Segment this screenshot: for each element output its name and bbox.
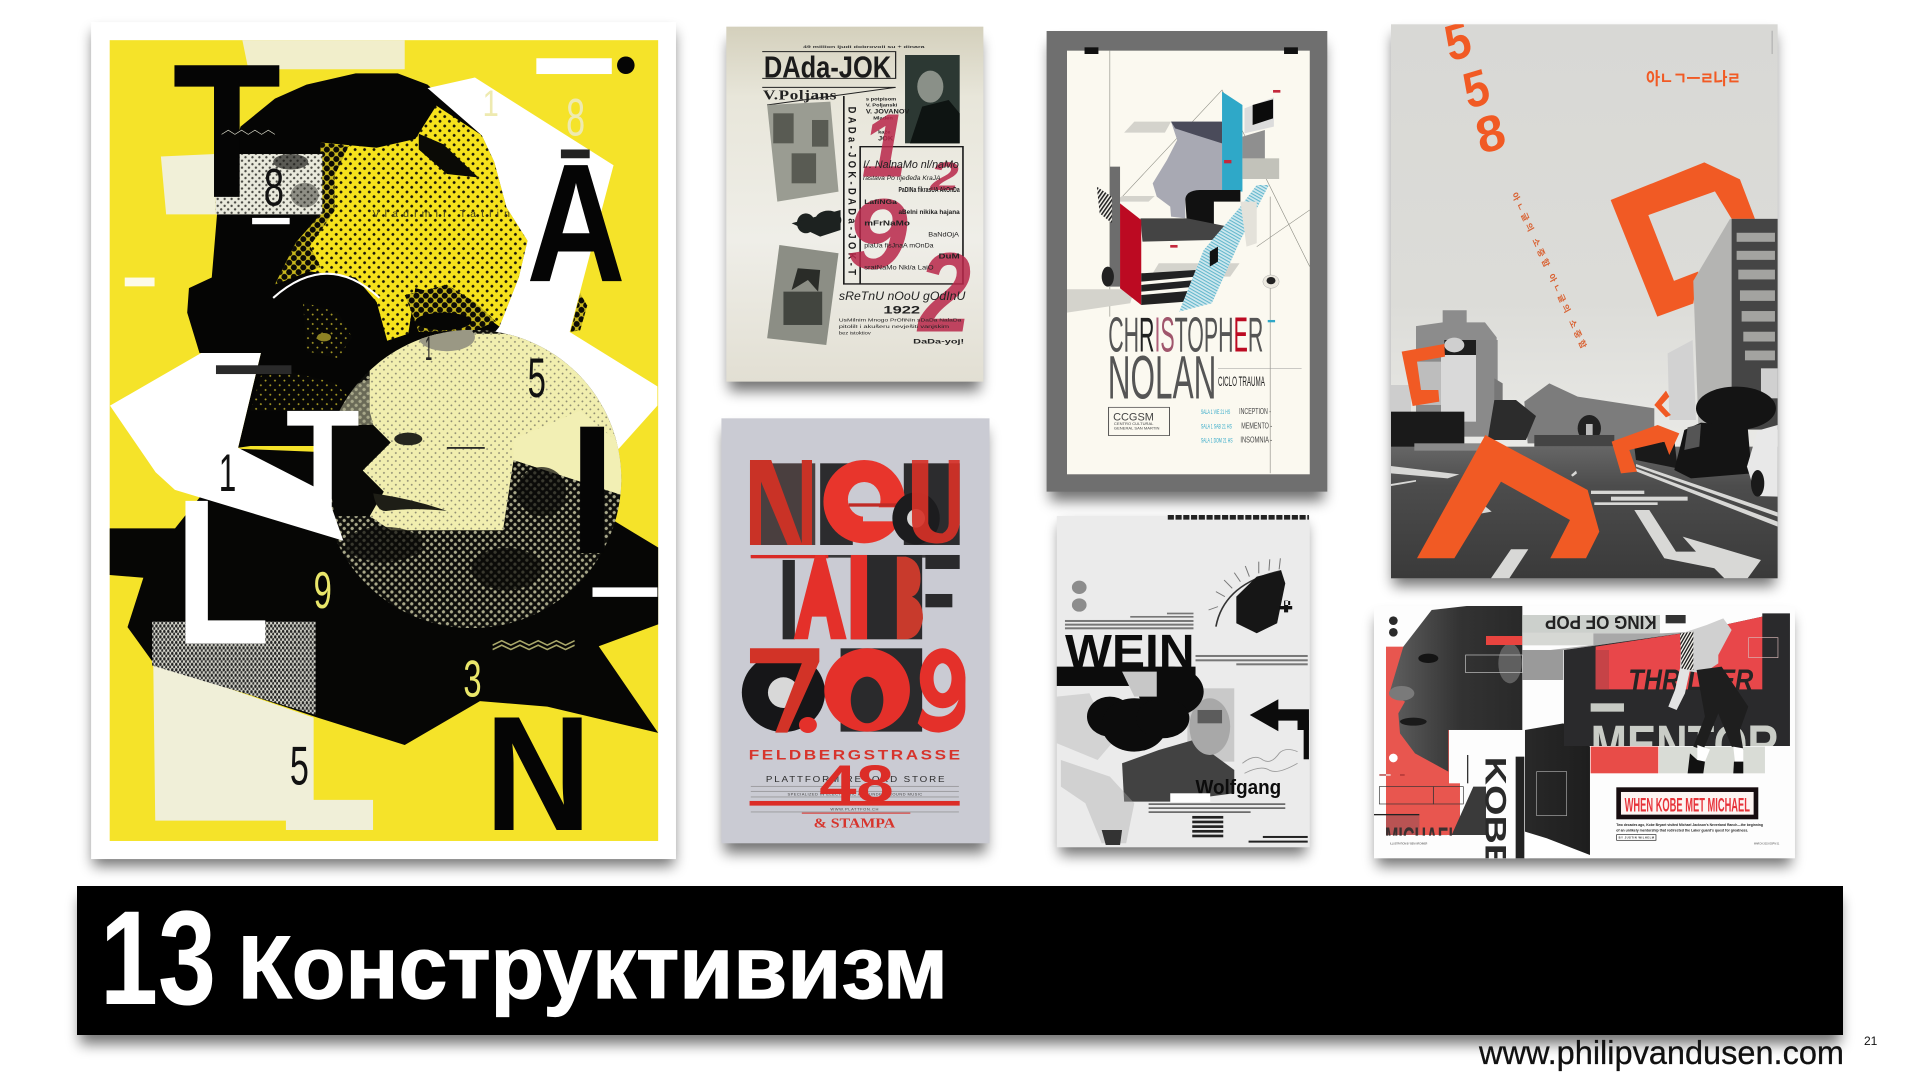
headline DAda-JOK: [762, 50, 896, 84]
title bar: [77, 886, 1843, 1035]
right column text: I/. NalnaMo nl/naMo: [863, 158, 959, 171]
left buildings: [1391, 338, 1536, 448]
Korean heading: 아ㄴㄱㅡㄹ나ㄹ: [1646, 70, 1741, 89]
digits upper: 1: [425, 330, 432, 368]
nose portrait: [1153, 122, 1222, 218]
horizon cars: [1414, 443, 1481, 451]
white dot and dashes: [1379, 754, 1405, 776]
right pale block: [1761, 368, 1778, 398]
black rule: [1374, 814, 1419, 815]
right column text: rastava Po rijeđeđa KraJA: [863, 174, 941, 182]
letter A with macron: A: [527, 129, 625, 317]
letter T white: T: [287, 412, 296, 428]
halftone face: [275, 106, 528, 341]
sky: [1391, 24, 1778, 578]
TAB letters: [751, 555, 923, 639]
digits upper: 1: [219, 444, 236, 503]
bottom text: bez istoktiov: [839, 331, 871, 336]
digits lower: 9: [314, 561, 332, 619]
statue: [783, 268, 822, 325]
numbers 558: 5: [1440, 12, 1477, 73]
collage photo top: [767, 102, 839, 202]
logo box: [1109, 407, 1169, 436]
outline rect ear: [1466, 655, 1522, 673]
head silhouette: [187, 73, 528, 448]
eye shade: [1171, 122, 1222, 143]
side bar: [1304, 720, 1309, 759]
V. Poljanski: V.Poljans: [763, 88, 836, 103]
title text: Конструктивизм: [238, 917, 948, 1017]
small poster text block: s potpisom: [866, 97, 897, 102]
small dark tag: [1666, 615, 1686, 623]
red 1 9 2 2: 9: [847, 178, 908, 290]
poster: Dada-Jok: [726, 27, 983, 382]
title number: 13: [100, 884, 216, 1033]
collage photo statue: [767, 245, 839, 345]
poster paper border: [91, 22, 676, 859]
red 1 9 2 2: 2: [917, 229, 971, 356]
pale skin: [363, 334, 622, 530]
thick rule: [750, 801, 960, 806]
digits upper: [219, 83, 585, 503]
small bars: [125, 56, 657, 597]
nose bridge dark: [415, 313, 471, 330]
torn white: [1525, 832, 1590, 858]
poster lower letters: [152, 457, 592, 866]
grey frame: [1047, 31, 1327, 492]
eye: [303, 302, 352, 358]
number 48: 48: [819, 756, 894, 813]
zigzag: [222, 130, 275, 134]
Wolfgang: Wolfgang: [1196, 775, 1281, 798]
bottom text: [839, 289, 966, 345]
small poster text block: V. Poljanski: [866, 103, 898, 108]
inverted KING OF POP: KING OF POP: [1545, 612, 1657, 633]
small poster text block: Mladen: [873, 116, 893, 121]
grey bands: [1067, 122, 1240, 313]
building photo: [1140, 218, 1236, 242]
store line: PLATTFORM RECORD STORE: [766, 775, 945, 784]
small poster text block: JOK: [878, 136, 893, 142]
right small building: [1668, 340, 1696, 420]
letter L: L: [175, 457, 270, 688]
screening list: SALA 1 SAB 21 HS: [1201, 422, 1232, 430]
shoulder: [1452, 787, 1488, 835]
web address: WWW.PLATTFON.CH: [830, 808, 879, 812]
page number: 21: [1864, 1034, 1878, 1048]
red thin rule: [802, 812, 910, 815]
hair streak: [419, 134, 478, 178]
poster ground: [91, 22, 676, 859]
radial graphic: [1209, 558, 1292, 633]
pale lower left patch: [153, 663, 373, 830]
flat pale plane: [514, 411, 622, 495]
headline DAda-JOK: DAda-JOK: [764, 50, 891, 84]
blue hatch band: [1179, 185, 1269, 312]
letter T: T: [172, 24, 281, 238]
white blocks: [1240, 202, 1257, 247]
nostril: [394, 433, 422, 445]
grey patch on circle left: [340, 380, 373, 425]
byline: BY JUSTIN WILHELM: [1619, 836, 1655, 840]
numbers 558: 5: [1458, 59, 1495, 120]
left tower top: [1416, 310, 1497, 409]
right block: [1242, 97, 1279, 179]
poster: Kobe meets Michael: [1374, 606, 1795, 870]
arrow: [1250, 699, 1309, 731]
bottom text: pitolilI i akušeru nevješiti vanjskim: [839, 324, 949, 330]
right column text: sratNaMo Nkl/a LaiO: [864, 265, 934, 271]
orange mid right form: [1612, 425, 1679, 473]
NEU letters: [750, 460, 960, 545]
white KOBE panel: [1449, 730, 1524, 783]
dark left of face: [332, 424, 391, 516]
small store text: SPECIALIZED IN ELECTRONIC AND UNDERGROUND MUSIC: [788, 793, 923, 796]
name Christopher: CHRISTOPHER: [1108, 307, 1263, 362]
dark red corner: [1386, 814, 1419, 835]
black collar shape: [110, 449, 658, 745]
7.09 figures: [750, 648, 965, 733]
blob: [1087, 667, 1204, 752]
portrait layers: [110, 24, 657, 628]
numbers 558: [1445, 24, 1505, 152]
poster: Tatlin: [91, 22, 676, 866]
Thriller text: THRILLER: [1628, 664, 1753, 697]
screening list: MEMENTO -: [1241, 421, 1272, 431]
pale shape on blob: [1122, 672, 1157, 697]
ciclo trauma: [1218, 368, 1302, 390]
poster: Seoul street: [1391, 12, 1778, 578]
sheet: [1374, 606, 1795, 858]
right column text: LafiNGa: [864, 198, 898, 206]
statue and tree line: [1534, 415, 1614, 447]
top dashes: [1168, 510, 1309, 524]
outline in shoulder: [1537, 772, 1567, 816]
red 1 9 2 2: 1: [862, 96, 907, 196]
orange left form: [1402, 344, 1445, 406]
circle with face: [321, 323, 622, 628]
orange square form: [1611, 162, 1755, 317]
road markings: [1391, 464, 1778, 578]
numbers 558: 8: [1471, 103, 1511, 166]
white shape left: [110, 353, 343, 541]
bottom text: sReTnU nOoU gOdInU: [839, 289, 966, 303]
deck text: Two decades ago, Kobe Bryant visited Michael Jackson's Neverland Ranch—the beginning: [1616, 823, 1763, 827]
small poster text block: V. JOVANOV: [866, 109, 910, 115]
grey collage: [1522, 632, 1693, 680]
letter I: [580, 427, 604, 553]
bottom text block: [1149, 793, 1285, 813]
KOBE white block: [1486, 783, 1515, 858]
stairs: [1141, 270, 1208, 305]
portrait photo: [905, 55, 960, 143]
blue panel: [1222, 92, 1242, 192]
headline box: WHEN KOBE MET MICHAEL: [1625, 795, 1750, 816]
brow shadow: [405, 285, 496, 332]
zigzag lower: [493, 641, 575, 650]
black strip: [1516, 757, 1524, 858]
digits upper: 8: [566, 88, 585, 147]
road: [1391, 447, 1778, 578]
logo box: GENERAL SAN MARTIN: [1114, 427, 1160, 430]
street scene: [1391, 338, 1778, 578]
two dots: [1389, 616, 1398, 637]
illustration credit: ILLUSTRATION BY BEN KIRCHNER: [1390, 843, 1428, 846]
KOBE vertical text: KOBE: [1478, 757, 1511, 870]
outline red panel: [1379, 787, 1463, 804]
logo box: CCGSM: [1113, 411, 1154, 423]
Michael text: MICHAEL: [1385, 822, 1458, 854]
orange bottom form: [1417, 435, 1599, 558]
screening list: [1201, 407, 1272, 445]
darker halftone transition: [275, 142, 349, 285]
text block: [1065, 613, 1308, 665]
black text: [1192, 816, 1308, 843]
red panel: [1120, 203, 1141, 305]
screening list: SALA 1 DOM 21 HS: [1201, 436, 1233, 444]
sky and upper forms: [1391, 12, 1778, 578]
Mentor text: MENTOR: [1591, 713, 1779, 775]
grey top: [419, 330, 475, 352]
pale top patch: [242, 40, 405, 69]
WEIN headline: WEIN: [1065, 625, 1195, 678]
& Stampa: & STAMPA: [814, 817, 895, 831]
aged paper: [726, 27, 983, 382]
row 1 collage: [750, 463, 960, 545]
top grey band: [1522, 615, 1660, 633]
red bar: [1486, 636, 1522, 645]
row 2 rule: [751, 555, 959, 558]
right column text: mFrNaMo: [864, 219, 910, 227]
frame lines: [844, 96, 963, 284]
eye icon: [1263, 275, 1279, 288]
right column text: BaNdOjA: [928, 230, 959, 238]
digits upper: 1: [483, 83, 499, 124]
right ear: [570, 293, 587, 332]
red and pale rects: [1591, 747, 1765, 773]
website: www.philipvandusen.com: [1478, 1034, 1844, 1071]
accents: [1170, 90, 1280, 322]
right trees: [1696, 387, 1776, 430]
headline line: 49 million ljudi dobrovoli su + dinara: [803, 44, 925, 49]
halftone lower left patch: [152, 622, 316, 715]
small pale bar: [1591, 703, 1624, 712]
poster name: Vladimir Tatlin: [372, 208, 510, 220]
poster: Christopher Nolan: [1047, 31, 1327, 492]
sheet: [1057, 516, 1310, 847]
logo box: CENTRO CULTURAL: [1114, 422, 1153, 426]
right column text: PaDINa fikrasUA AkOnDa: [898, 186, 960, 194]
vertical text: DADa-JOK-DADa-JOK-T: [845, 107, 857, 276]
letter N: N: [485, 683, 592, 866]
byline: [1617, 835, 1656, 840]
pale patch by T: [161, 154, 215, 214]
digits lower: 3: [463, 650, 482, 708]
right column text: DuM: [938, 252, 960, 260]
deck text: of an unlikely mentorship that redirected the Laker guard's quest for greatness.: [1616, 828, 1748, 832]
grey sheet: [721, 418, 989, 843]
darker red strip: [1596, 650, 1609, 689]
thin grid lines: [1110, 51, 1310, 473]
dancer figure: [1668, 618, 1748, 773]
head: [1389, 606, 1590, 855]
bottom text: DaDa-yoj!: [913, 337, 964, 345]
right tall building: [1693, 219, 1778, 430]
deck text: [1616, 823, 1763, 832]
poster: Christopher Nolan: NOLAN: [1108, 343, 1216, 412]
right column text: [863, 158, 960, 271]
letter T white: [287, 411, 358, 509]
bottom text: UsMilnim Mnogo PrOfiNIn sDaDa NalaDa: [839, 318, 961, 323]
row 3 collage: [742, 648, 922, 732]
ciclo trauma: CICLO TRAUMA: [1218, 374, 1265, 390]
paper: [1067, 51, 1310, 474]
red 1 9 2 2: 2: [929, 155, 959, 199]
right column text: plaUa fisJnaA mOnDa: [864, 241, 934, 249]
diagonal Korean text: 아ㄴ글의 소중함 아ㄴ글의 소중함: [1510, 191, 1588, 350]
white arc: [273, 274, 379, 298]
red panel: [1386, 647, 1460, 835]
red 1 9 2 2: [847, 96, 971, 356]
outline rect right: [1749, 638, 1778, 658]
screening list: INSOMNIA -: [1240, 435, 1272, 445]
digits lower: 5: [290, 736, 309, 797]
poster: Wein Wolfgang: [1057, 516, 1310, 847]
digits upper: 8: [264, 159, 284, 218]
photo portrait: [1057, 688, 1234, 845]
orange small form: [1654, 391, 1671, 417]
halftone patch by T: [215, 154, 322, 214]
handwriting: [1242, 749, 1298, 773]
parked cars: [1634, 423, 1778, 497]
lower cheek halftone: [250, 372, 349, 418]
headline box: [1616, 787, 1758, 819]
rules: [751, 786, 959, 812]
small poster text block: kaže: [878, 130, 891, 135]
right column text: aBeIni nikika hajana: [898, 208, 960, 216]
dark arch: [1185, 190, 1240, 230]
poster: Neu Tab: [721, 418, 989, 843]
small poster text block: [866, 97, 910, 142]
left building: [1097, 167, 1120, 287]
collage photo dark parts: [773, 113, 828, 183]
rider figure: [792, 210, 841, 237]
binder clips: [1085, 47, 1298, 54]
street name: FELDBERGSTRASSE: [749, 748, 960, 763]
white shape right: [428, 78, 657, 457]
dark block: [1564, 613, 1790, 746]
digits upper: 5: [528, 347, 546, 409]
bottom text: 1922: [883, 303, 920, 316]
vertical rule in panel: [1467, 755, 1468, 783]
mountain: [1524, 383, 1654, 443]
digits lower: [290, 561, 482, 797]
screening list: INCEPTION -: [1239, 407, 1271, 417]
facial details: [1389, 643, 1522, 726]
small credit: [1771, 31, 1774, 54]
black bar: [1057, 667, 1196, 686]
row 2 collage: [783, 555, 960, 639]
screening list: SALA 1 VIE 21 HS: [1201, 408, 1230, 416]
yellow field: [110, 40, 658, 841]
mouth: [373, 493, 447, 511]
grey dots: [1072, 581, 1087, 612]
red panel top right: [1596, 617, 1762, 689]
folio: MARCH 2019 ESPN 51: [1754, 843, 1780, 846]
neck blotches: [345, 467, 566, 590]
